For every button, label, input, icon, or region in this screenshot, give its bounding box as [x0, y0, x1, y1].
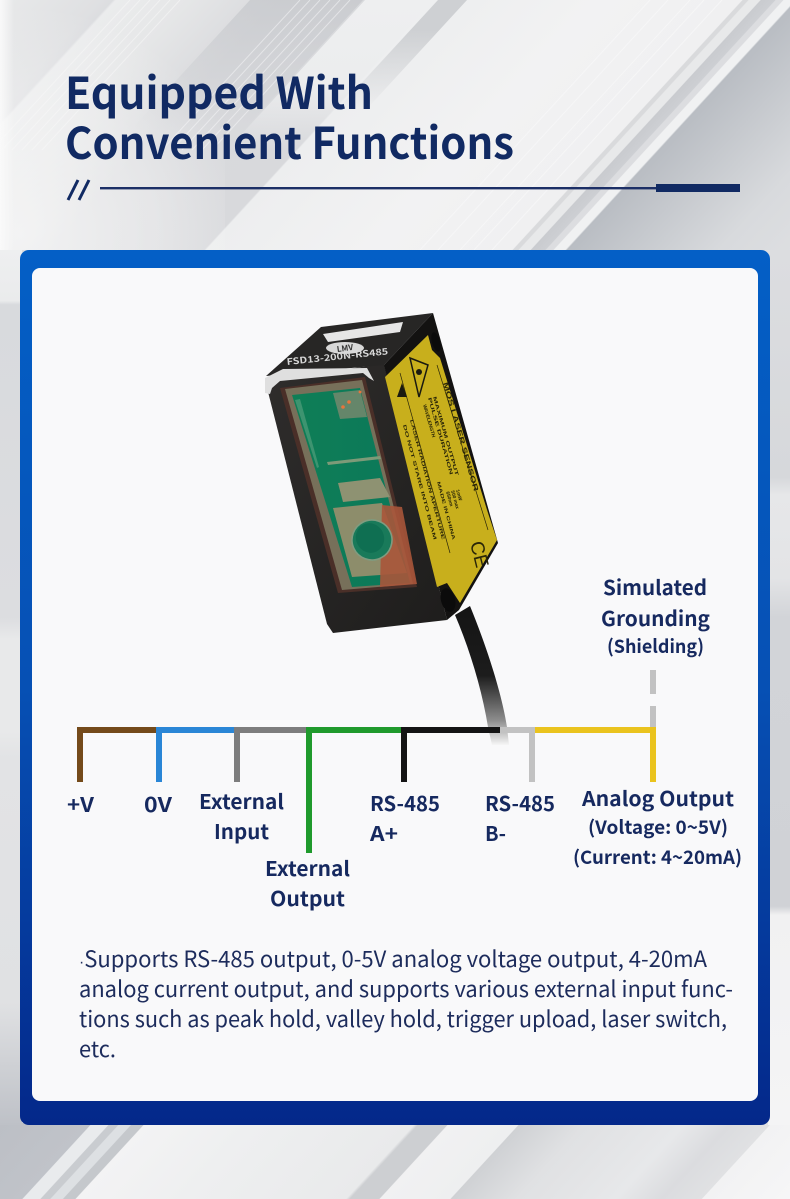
description text	[79, 942, 733, 1064]
sensor side face	[384, 313, 498, 620]
wire: analog output	[535, 727, 656, 782]
screw holes	[430, 331, 458, 613]
label: analog output: Analog Output	[581, 782, 734, 812]
label: RS-485 B-: B-	[485, 817, 506, 847]
top window	[323, 322, 403, 342]
sensor top face	[266, 313, 433, 376]
label: analog output	[573, 782, 742, 870]
label text	[402, 382, 479, 541]
wire: RS-485 B-	[500, 727, 535, 782]
sensor body front	[265, 364, 447, 633]
label: external input: Input	[214, 815, 269, 845]
wire: RS-485 A+	[401, 727, 500, 782]
wiring diagram	[77, 670, 656, 853]
title: Convenient Functions	[65, 108, 514, 172]
front window	[280, 377, 417, 593]
description text: analog current output, and supports various external input func-	[79, 972, 733, 1004]
lens pad	[333, 503, 407, 577]
label: RS-485 A+: A+	[369, 817, 398, 847]
warning triangle	[410, 358, 428, 397]
label: analog output: (Voltage: 0~5V)	[588, 814, 728, 840]
description text: ·Supports RS-485 output, 0-5V analog voltage output, 4-20mA	[79, 942, 707, 974]
label text: MOS LASER SENSOR	[441, 382, 479, 492]
laser sensor product	[265, 313, 498, 633]
description text: etc.	[79, 1032, 116, 1064]
cable	[455, 606, 509, 745]
label text: 1mW	[454, 489, 463, 502]
lens	[345, 513, 399, 567]
chip square	[333, 390, 367, 419]
main white panel	[32, 268, 758, 1101]
wire: simulated grounding	[650, 670, 656, 728]
yellow label	[385, 335, 497, 603]
description text: tions such as peak hold, valley hold, trigger upload, laser switch,	[79, 1002, 727, 1034]
label: external input: External	[199, 785, 284, 815]
title	[65, 58, 514, 172]
label text: MADE IN CHINA	[436, 481, 457, 541]
top logo	[326, 342, 364, 355]
model text: FSD13-200N-RS485	[286, 344, 389, 368]
label: RS-485 B-: RS-485	[485, 787, 555, 817]
label: RS-485 B-	[485, 787, 555, 847]
label text: PULSE DURATION	[426, 397, 454, 476]
label: external output	[265, 852, 350, 912]
label rules	[400, 365, 488, 553]
title rule with slashes	[68, 180, 740, 200]
label: analog output: (Current: 4~20mA)	[573, 844, 742, 870]
label: external input	[199, 785, 284, 845]
label: RS-485 A+	[369, 787, 440, 847]
label text: WAVELENGTH	[421, 404, 436, 439]
blue panel frame	[20, 250, 770, 1125]
metal bezel	[265, 368, 374, 394]
wire: +V	[77, 727, 156, 782]
label: simulated grounding	[601, 571, 710, 659]
label: simulated grounding: Simulated	[603, 571, 707, 601]
label: external output: External	[265, 852, 350, 882]
board line	[327, 456, 381, 465]
circuit board	[292, 388, 410, 587]
wire: external input	[234, 727, 307, 782]
label text: LASER RADIATION APERTURE	[409, 419, 446, 540]
label: simulated grounding: Grounding	[601, 602, 710, 632]
wire: external output	[306, 727, 402, 853]
label text: MAXIMUM OUTPUT	[431, 396, 459, 476]
label text: 500 max	[449, 490, 460, 510]
label text: DO NOT STARE INTO BEAM	[402, 424, 438, 541]
label: simulated grounding: (Shielding)	[607, 633, 704, 659]
title: Equipped With	[65, 58, 373, 122]
label: 0V: 0V	[144, 788, 172, 818]
top logo: LMV	[336, 342, 354, 355]
wire: 0V	[156, 727, 235, 782]
small pad	[338, 478, 390, 502]
label: RS-485 A+: RS-485	[370, 787, 440, 817]
label text: 650nm	[444, 491, 454, 507]
label: +V: +V	[67, 788, 94, 818]
CE mark: CE	[465, 539, 492, 570]
arrow mark	[397, 383, 407, 397]
label: external output: Output	[270, 882, 345, 912]
